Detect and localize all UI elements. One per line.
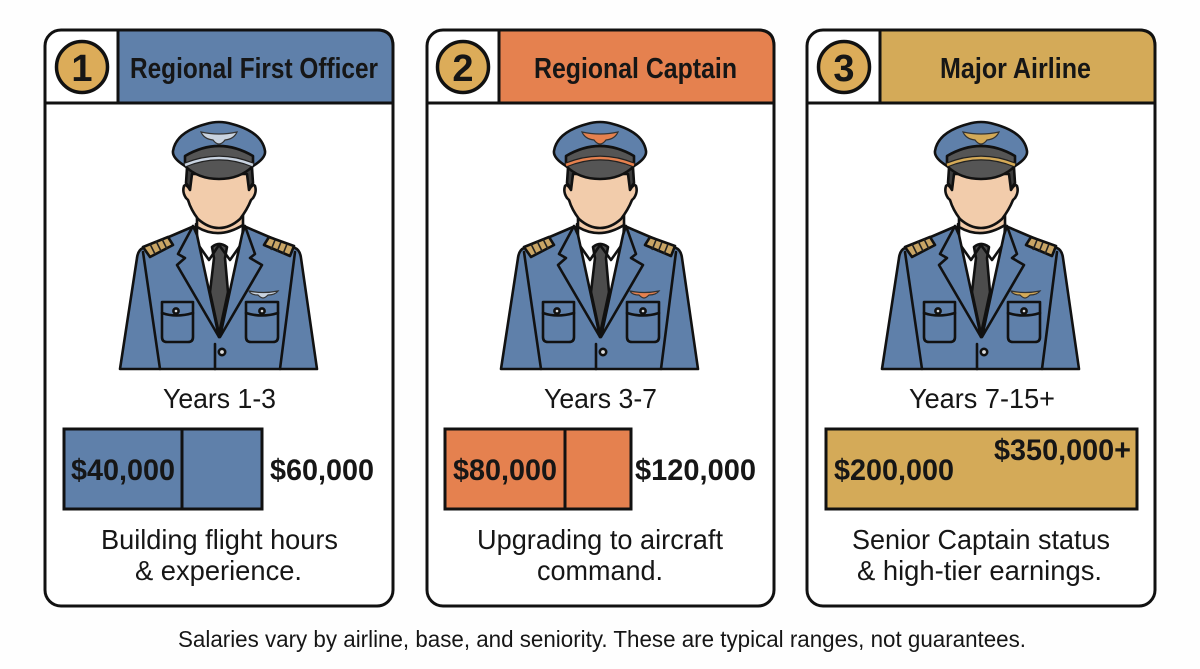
card outline xyxy=(427,30,774,606)
description: Upgrading to aircraft xyxy=(477,524,723,555)
header band xyxy=(499,30,774,103)
card outline xyxy=(807,30,1155,606)
number badge: 1 xyxy=(71,48,93,90)
description: Senior Captain status xyxy=(852,524,1110,555)
number badge xyxy=(438,42,488,92)
years label: Years 7-15+ xyxy=(909,383,1055,414)
header band xyxy=(880,30,1155,103)
description: & high-tier earnings. xyxy=(857,555,1102,586)
icon: pilot in uniform xyxy=(501,122,698,369)
footnote: Salaries vary by airline, base, and seniority. These are typical ranges, not guarantees. xyxy=(178,626,1026,652)
description: & experience. xyxy=(135,555,302,586)
heading: Major Airline xyxy=(940,53,1091,85)
salary maximum: $120,000 xyxy=(635,454,756,487)
description xyxy=(477,524,723,586)
icon: pilot in uniform xyxy=(120,122,317,369)
icon: pilot in uniform xyxy=(882,122,1079,369)
description: command. xyxy=(537,555,663,586)
header band xyxy=(118,30,393,103)
number badge xyxy=(56,42,108,92)
salary bar: $200,000 xyxy=(834,454,954,487)
description xyxy=(101,524,338,586)
salary maximum: $60,000 xyxy=(270,454,374,487)
salary bar xyxy=(445,429,631,509)
description: Building flight hours xyxy=(101,524,338,555)
number badge: 3 xyxy=(833,48,855,90)
salary bar xyxy=(826,429,1137,509)
panel: Regional First Officer xyxy=(45,30,393,606)
salary bar: $40,000 xyxy=(71,454,175,487)
salary bar: $350,000+ xyxy=(994,434,1131,467)
number badge: 2 xyxy=(452,48,474,90)
heading: Regional First Officer xyxy=(130,53,378,85)
salary bar: $80,000 xyxy=(453,454,557,487)
years label: Years 3-7 xyxy=(544,383,657,414)
panel: Regional Captain xyxy=(427,30,774,606)
heading: Regional Captain xyxy=(534,53,737,85)
card outline xyxy=(45,30,393,606)
panel: Major Airline xyxy=(807,30,1155,606)
salary bar xyxy=(64,429,262,509)
number badge xyxy=(818,42,870,92)
years label: Years 1-3 xyxy=(163,383,276,414)
description xyxy=(852,524,1110,586)
